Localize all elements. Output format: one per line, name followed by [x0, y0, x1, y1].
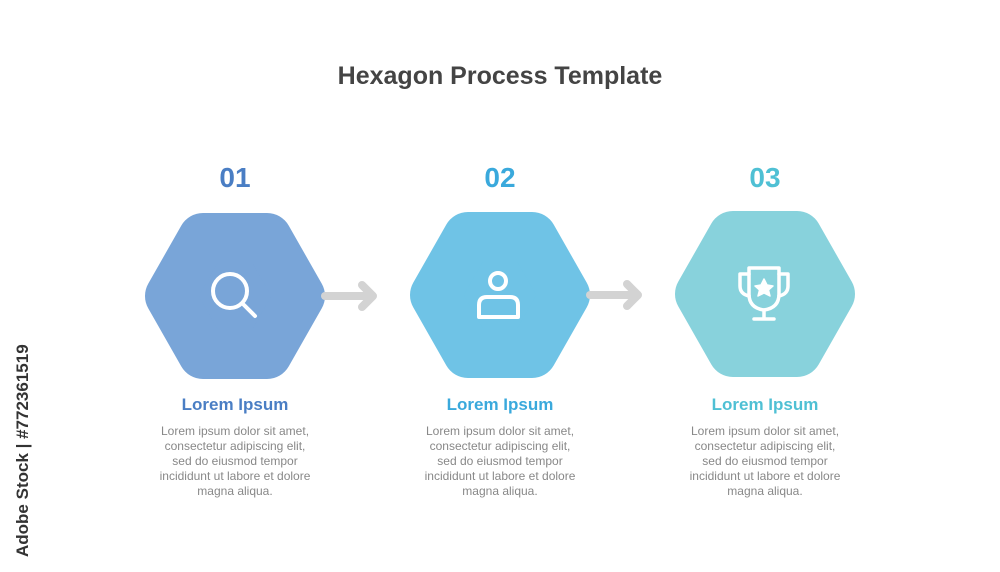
text 2: incididunt ut labore et dolore: [425, 469, 576, 483]
side credit: Adobe Stock | #772361519: [13, 344, 32, 557]
title 1: Lorem Ipsum: [182, 395, 288, 414]
arrow 1: [325, 285, 373, 307]
text 1: incididunt ut labore et dolore: [160, 469, 311, 483]
step 1: [160, 162, 311, 498]
text 2: magna aliqua.: [462, 484, 538, 498]
text 3: consectetur adipiscing elit,: [695, 439, 835, 453]
arrow 2: [590, 284, 638, 306]
text 3: incididunt ut labore et dolore: [690, 469, 841, 483]
text 1: sed do eiusmod tempor: [172, 454, 298, 468]
text 1: Lorem ipsum dolor sit amet,: [161, 424, 309, 438]
text 3: sed do eiusmod tempor: [702, 454, 828, 468]
title 2: Lorem Ipsum: [447, 395, 553, 414]
text 2: sed do eiusmod tempor: [437, 454, 563, 468]
step 3: [690, 162, 841, 498]
number 02: 02: [484, 162, 516, 193]
text 1: consectetur adipiscing elit,: [165, 439, 305, 453]
title 3: Lorem Ipsum: [712, 395, 818, 414]
hexagon 2: [435, 237, 565, 353]
icon: magnifier: [213, 274, 255, 316]
step 2: [425, 162, 576, 498]
icon: user: [479, 273, 518, 317]
text 2: consectetur adipiscing elit,: [430, 439, 570, 453]
text 3: magna aliqua.: [727, 484, 803, 498]
hexagon 3: [700, 236, 830, 352]
hexagon 1: [170, 238, 300, 354]
number 03: 03: [749, 162, 781, 193]
icon: trophy: [740, 268, 788, 319]
text 1: magna aliqua.: [197, 484, 273, 498]
text 2: Lorem ipsum dolor sit amet,: [426, 424, 574, 438]
text 3: Lorem ipsum dolor sit amet,: [691, 424, 839, 438]
title: Hexagon Process Template: [338, 62, 662, 90]
number 01: 01: [219, 162, 251, 193]
